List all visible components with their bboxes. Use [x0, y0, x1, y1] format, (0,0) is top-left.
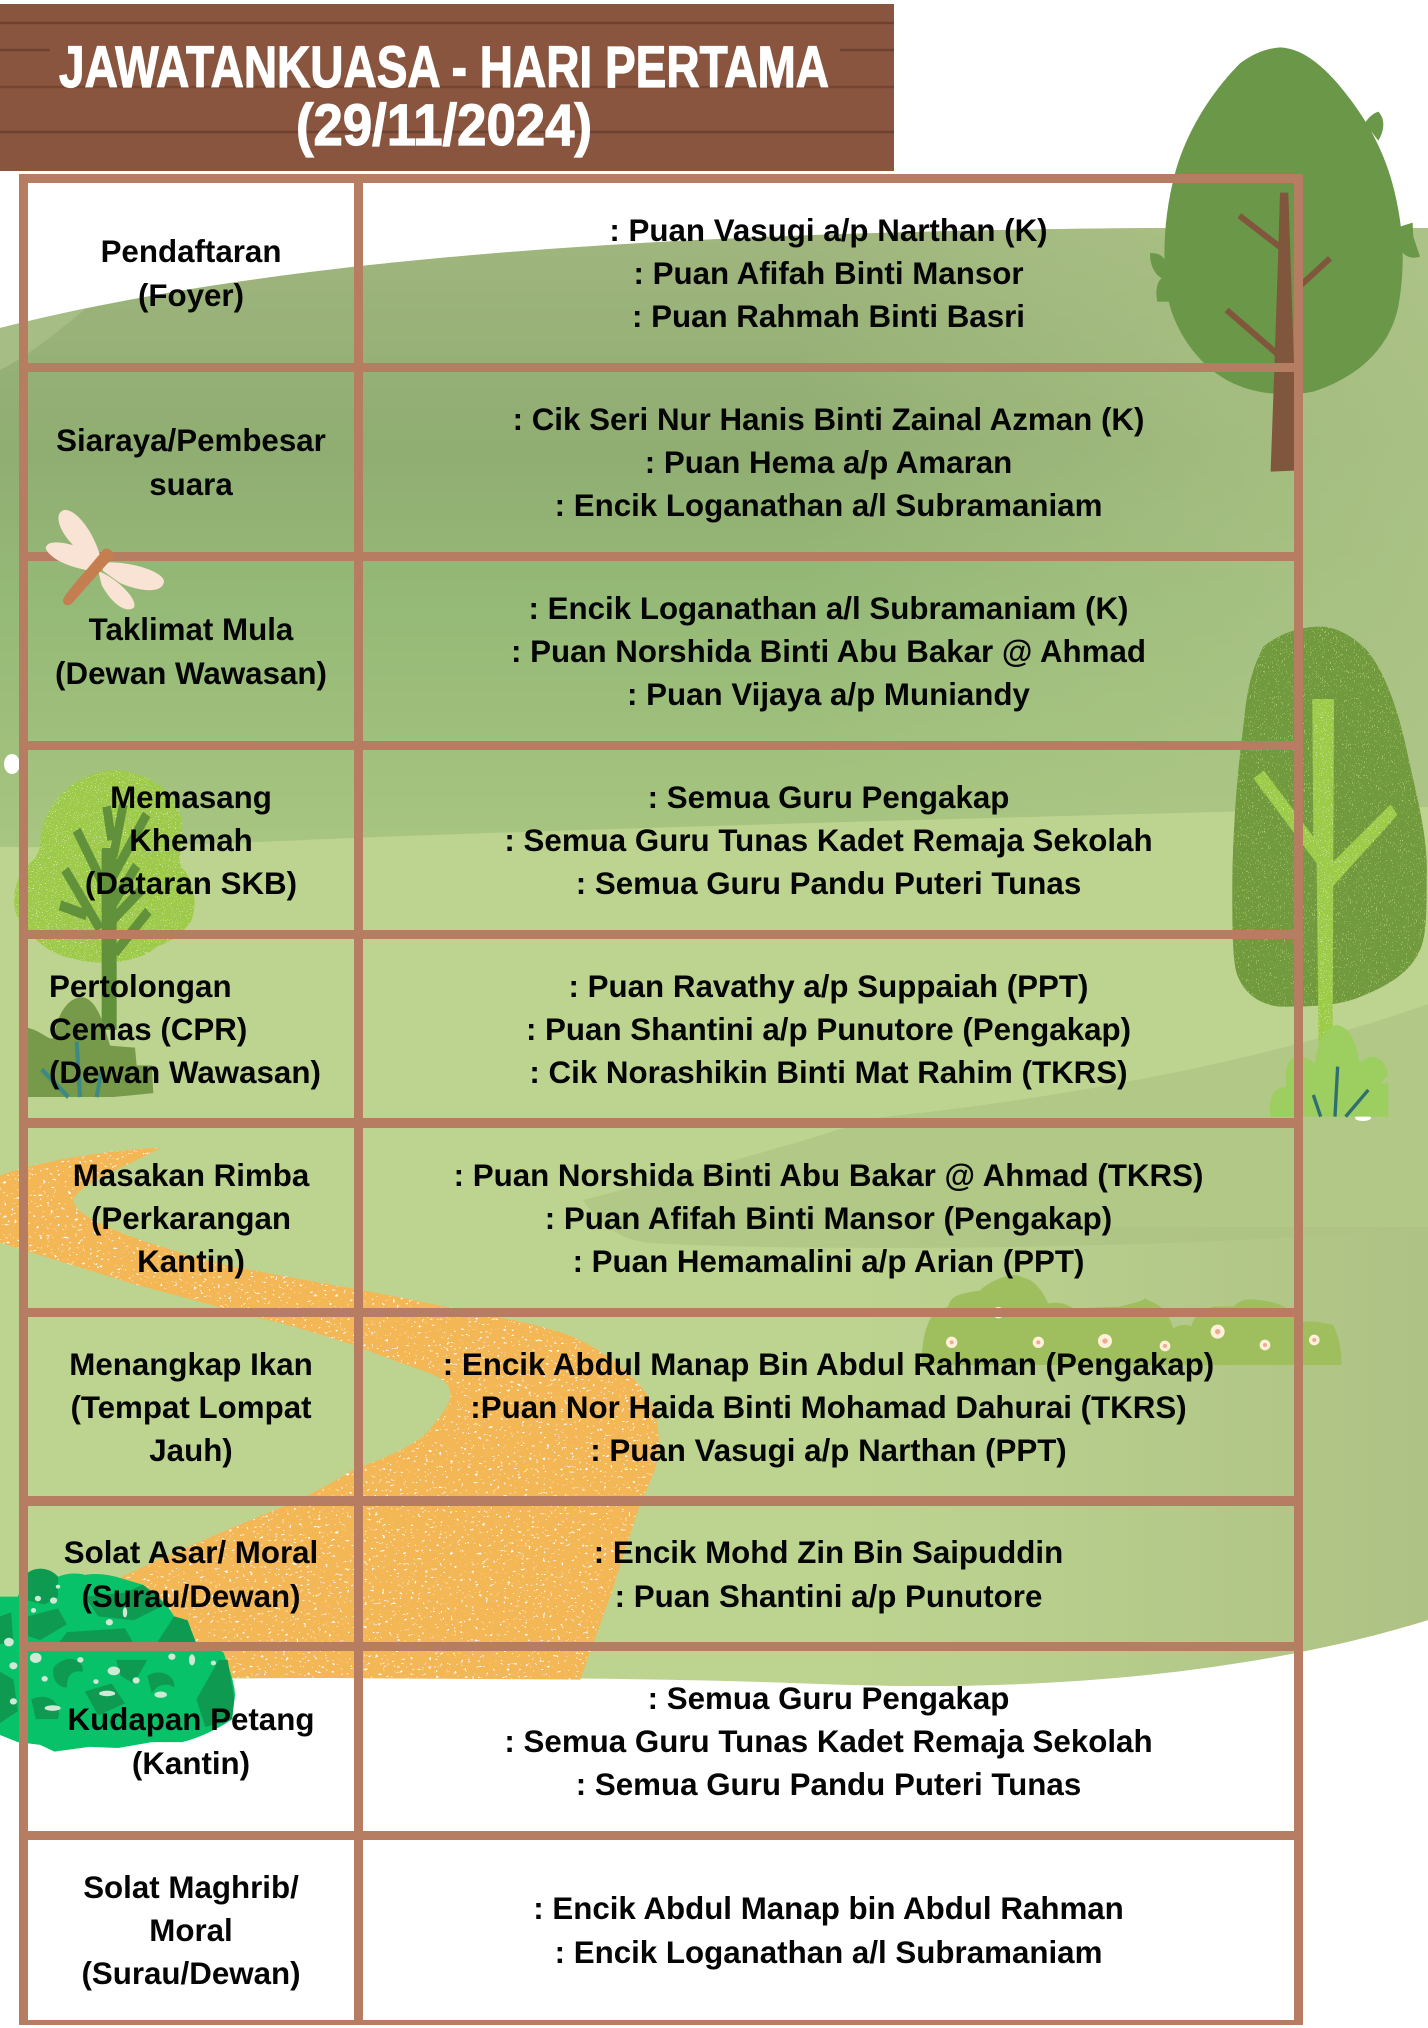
label: [69, 1347, 313, 1468]
names: [504, 1681, 1153, 1802]
label: Solat Asar/ Moral: [64, 1535, 318, 1570]
label: Cemas (CPR): [49, 1012, 247, 1047]
label: Pendaftaran: [101, 234, 281, 269]
names: : Puan Vasugi a/p Narthan (K): [609, 213, 1048, 248]
label: [49, 969, 321, 1090]
label: [101, 234, 281, 312]
names: : Puan Shantini a/p Punutore (Pengakap): [526, 1012, 1131, 1047]
label: Menangkap Ikan: [69, 1347, 313, 1382]
names: : Semua Guru Tunas Kadet Remaja Sekolah: [504, 1724, 1153, 1759]
right tree: [1232, 627, 1427, 1117]
flowering bush: [922, 1275, 1342, 1365]
label: [85, 780, 297, 901]
names: : Puan Afifah Binti Mansor (Pengakap): [545, 1201, 1112, 1236]
label: Siaraya/Pembesar: [56, 423, 326, 458]
row: Memasang Khemah: [85, 780, 1153, 901]
names: : Puan Hema a/p Amaran: [645, 445, 1012, 480]
label: Memasang: [110, 780, 272, 815]
names: : Semua Guru Pengakap: [648, 780, 1009, 815]
names: [443, 1347, 1214, 1468]
names: : Encik Abdul Manap Bin Abdul Rahman (Pengakap): [443, 1347, 1214, 1382]
names: [594, 1535, 1063, 1614]
row: Masakan Rimba: [73, 1158, 1203, 1279]
names: [526, 969, 1131, 1090]
label: (Kantin): [132, 1746, 250, 1780]
label: Solat Maghrib/: [83, 1870, 299, 1905]
orange path: [0, 1148, 659, 1680]
names: [511, 591, 1146, 712]
names: : Encik Loganathan a/l Subramaniam: [555, 1934, 1102, 1970]
names: [454, 1158, 1203, 1279]
label: [56, 423, 326, 502]
row: Taklimat Mula: [55, 591, 1146, 712]
names: : Semua Guru Pandu Puteri Tunas: [576, 866, 1081, 901]
top right tree: [1150, 47, 1420, 472]
label: Moral: [149, 1913, 233, 1948]
label: Kudapan Petang: [68, 1702, 314, 1737]
row: Pertolongan Cemas: [49, 969, 1131, 1090]
names: : Puan Ravathy a/p Suppaiah (PPT): [569, 969, 1088, 1004]
names: : Puan Norshida Binti Abu Bakar @ Ahmad: [511, 634, 1146, 669]
names: : Encik Mohd Zin Bin Saipuddin: [594, 1535, 1063, 1570]
names: [609, 213, 1048, 334]
row: Pendaftaran: [101, 213, 1048, 334]
label: [81, 1870, 301, 1991]
label: (Surau/Dewan): [81, 1578, 301, 1614]
label: (Surau/Dewan): [81, 1956, 301, 1991]
names: : Puan Afifah Binti Mansor: [633, 256, 1024, 291]
label: (Dataran SKB): [85, 866, 297, 901]
label: (Dewan Wawasan): [55, 656, 327, 690]
names: [533, 1891, 1124, 1970]
label: (Tempat Lompat: [70, 1390, 312, 1425]
row: Siaraya: [56, 402, 1144, 523]
label: [64, 1535, 318, 1614]
title text: (29/11/2024): [296, 93, 592, 158]
green bush: [0, 1569, 235, 1752]
names: : Puan Shantini a/p Punutore: [615, 1578, 1042, 1614]
names: : Encik Loganathan a/l Subramaniam: [555, 488, 1102, 523]
icon: dragonfly: [46, 510, 164, 610]
left tree and shrub: [14, 770, 195, 1097]
label: (Perkarangan: [91, 1201, 291, 1236]
label: (Dewan Wawasan): [49, 1055, 321, 1090]
names: : Puan Norshida Binti Abu Bakar @ Ahmad (TKRS): [454, 1158, 1203, 1193]
title text: [59, 35, 829, 158]
label: [73, 1158, 310, 1279]
label: [68, 1702, 314, 1780]
names: [504, 780, 1153, 901]
label: Jauh): [149, 1433, 233, 1468]
names: : Puan Hemamalini a/p Arian (PPT): [573, 1244, 1084, 1279]
label: suara: [149, 466, 233, 502]
row: Menangkap Ikan: [69, 1347, 1214, 1468]
names: : Encik Abdul Manap bin Abdul Rahman: [533, 1891, 1124, 1926]
names: : Cik Norashikin Binti Mat Rahim (TKRS): [529, 1055, 1128, 1090]
names: : Semua Guru Pengakap: [648, 1681, 1009, 1716]
label: (Foyer): [138, 278, 244, 312]
names: :Puan Nor Haida Binti Mohamad Dahurai (TKRS): [470, 1390, 1187, 1425]
names: [513, 402, 1144, 523]
label: [55, 612, 327, 690]
row: Kudapan Petang: [68, 1681, 1153, 1802]
names: : Encik Loganathan a/l Subramaniam (K): [529, 591, 1128, 626]
names: : Puan Rahmah Binti Basri: [632, 299, 1025, 334]
row: Solat Maghrib: [81, 1870, 1124, 1991]
names: : Semua Guru Tunas Kadet Remaja Sekolah: [504, 823, 1153, 858]
title banner: [0, 4, 894, 171]
label: Khemah: [129, 823, 253, 858]
names: : Puan Vijaya a/p Muniandy: [627, 677, 1030, 712]
names: : Semua Guru Pandu Puteri Tunas: [576, 1767, 1081, 1802]
label: Masakan Rimba: [73, 1158, 309, 1193]
white spots: [4, 754, 1371, 1121]
label: Kantin): [137, 1244, 245, 1279]
label: Taklimat Mula: [89, 612, 293, 647]
names: : Cik Seri Nur Hanis Binti Zainal Azman (K): [513, 402, 1144, 437]
row: Solat Asar: [64, 1535, 1063, 1614]
label: Pertolongan: [49, 969, 232, 1004]
names: : Puan Vasugi a/p Narthan (PPT): [590, 1433, 1067, 1468]
